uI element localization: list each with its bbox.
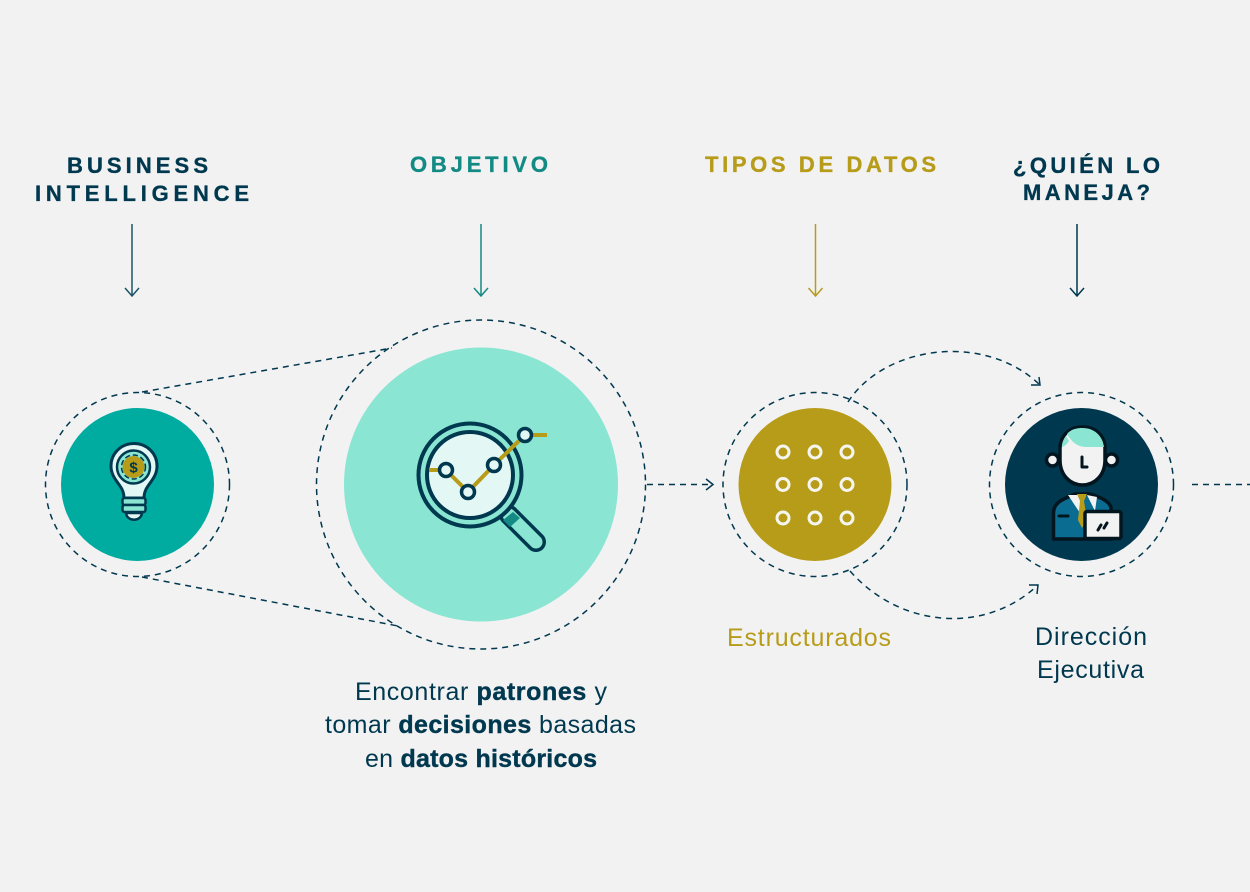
circle: tipos de datos	[738, 408, 892, 561]
heading: Business Intelligence	[35, 153, 249, 206]
arrow: tipos de datos	[808, 224, 822, 296]
arrow: business intelligence	[125, 224, 139, 296]
text: objetivo description: tomar decisiones basadas	[325, 711, 636, 739]
label: Direccion Ejecutiva: Dirección	[1035, 623, 1147, 651]
connector: bottom tangent line	[142, 577, 398, 626]
heading: Quién lo maneja: MANEJA?	[1023, 180, 1150, 205]
arrow: upper curve	[848, 351, 1040, 402]
label: Direccion Ejecutiva: Ejecutiva	[1037, 656, 1144, 684]
dashed ring: quien lo maneja	[990, 392, 1174, 576]
text: objetivo description: Encontrar patrones y	[355, 678, 608, 706]
heading: Business Intelligence: INTELLIGENCE	[35, 181, 249, 206]
icon: executive with laptop	[1046, 427, 1121, 539]
dashed ring: objetivo	[316, 320, 646, 649]
dashed ring: business intelligence	[46, 392, 230, 576]
icon: light bulb with dollar	[111, 444, 157, 520]
connector: top tangent line	[142, 348, 392, 392]
arrow: objetivo	[474, 224, 488, 296]
arrow: quien lo maneja	[1070, 224, 1084, 296]
heading: Quién lo maneja: ¿QUIÉN LO	[1013, 153, 1160, 178]
circle: quien lo maneja	[1005, 408, 1158, 561]
label: Direccion Ejecutiva	[1035, 623, 1147, 684]
heading: Quién lo maneja	[1013, 153, 1160, 205]
heading: Tipos de datos: TIPOS DE DATOS	[705, 152, 936, 177]
dashed ring: tipos de datos	[723, 392, 907, 576]
arrow: lower curve	[850, 571, 1038, 619]
arrow: exit line	[1192, 484, 1250, 486]
label: Estructurados: Estructurados	[727, 624, 891, 652]
arrow: objetivo to datos	[647, 479, 713, 490]
heading: Objetivo: OBJETIVO	[410, 152, 548, 177]
icon: magnifying glass with chart	[418, 424, 547, 542]
icon: light bulb with dollar: $	[129, 460, 138, 476]
circle: business intelligence	[61, 408, 214, 561]
text: objetivo description: en datos históricos	[365, 745, 597, 773]
icon: dot grid	[777, 446, 853, 524]
heading: Business Intelligence: BUSINESS	[67, 153, 208, 178]
text: objetivo description	[325, 678, 636, 773]
circle: objetivo	[344, 348, 618, 622]
